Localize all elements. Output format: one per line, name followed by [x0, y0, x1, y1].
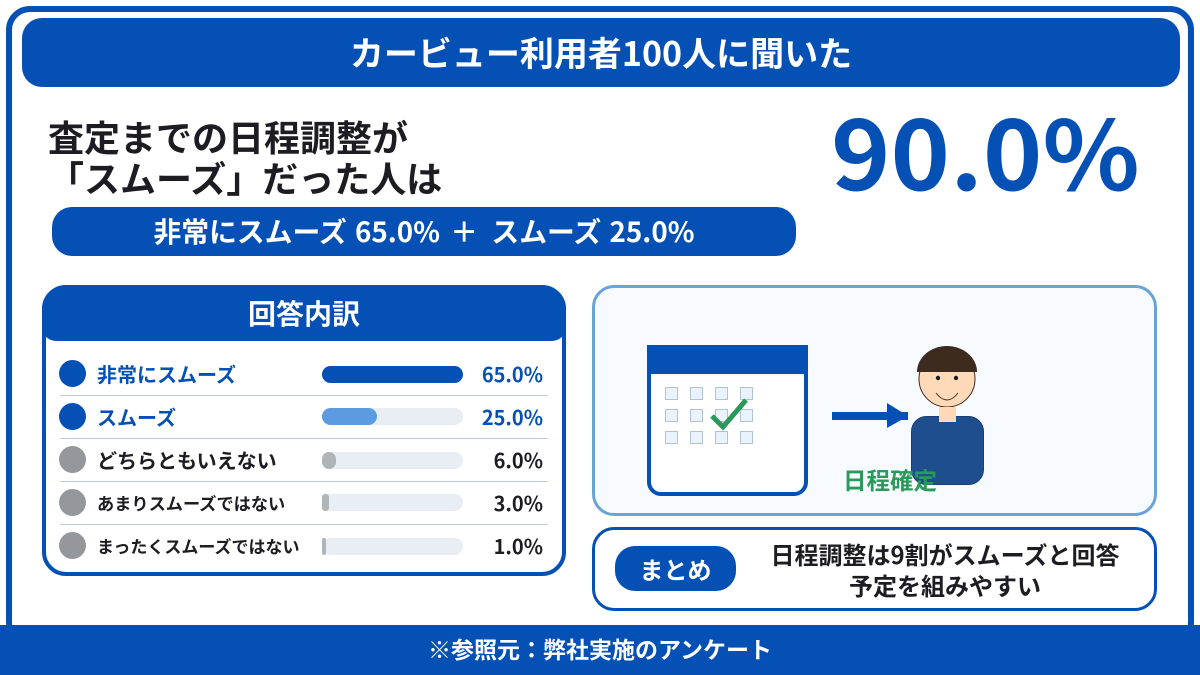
row 4 value: 3.0%	[494, 488, 543, 517]
panel: summary	[592, 527, 1157, 611]
row 4 marker	[59, 489, 86, 516]
row 1 label: 非常にスムーズ	[97, 359, 236, 388]
row 2 bar	[322, 408, 463, 425]
row 1 marker	[59, 360, 86, 387]
summary text: 日程調整は9割がスムーズと回答	[771, 536, 1119, 571]
row 5 marker	[59, 532, 86, 559]
row 3 marker	[59, 446, 86, 473]
row 5 bar	[322, 538, 463, 555]
arrow	[832, 403, 908, 428]
panel: answer breakdown	[42, 285, 566, 576]
title banner	[22, 18, 1180, 87]
summary text	[771, 536, 1119, 602]
label: 日程確定: 日程確定	[843, 462, 937, 496]
summary badge: まとめ	[640, 551, 712, 586]
footer source bar: ※参照元：弊社実施のアンケート	[428, 631, 772, 665]
row 4 label: あまりスムーズではない	[97, 490, 285, 515]
breakdown pill: 非常にスムーズ 65.0% ＋ スムーズ 25.0%	[153, 211, 695, 251]
heading: question: 査定までの日程調整が	[48, 110, 408, 162]
breakdown pill	[52, 207, 796, 256]
row 5 label: まったくスムーズではない	[97, 533, 299, 558]
title banner: カービュー利用者100人に聞いた	[350, 27, 852, 76]
summary text: 予定を組みやすい	[849, 567, 1041, 602]
footer source bar	[0, 625, 1200, 675]
row 1 value: 65.0%	[482, 359, 543, 388]
panel heading: 回答内訳	[42, 285, 566, 341]
row 3 bar	[322, 452, 463, 469]
summary badge	[615, 546, 736, 591]
row 5 value: 1.0%	[494, 531, 543, 560]
heading: question: 「スムーズ」だった人は	[48, 151, 442, 203]
icon: calendar	[647, 345, 808, 494]
icon: person	[912, 346, 984, 484]
row 2 marker	[59, 403, 86, 430]
row 2 label: スムーズ	[97, 402, 176, 431]
big number: 90.0%: 90.0%	[831, 79, 1140, 218]
row 1 bar	[322, 366, 463, 383]
heading: question	[48, 110, 442, 203]
panel heading: 回答内訳: 回答内訳	[248, 293, 360, 333]
row 3 value: 6.0%	[494, 445, 543, 474]
row 2 value: 25.0%	[482, 402, 543, 431]
panel: illustration	[592, 285, 1157, 516]
row 3 label: どちらともいえない	[97, 445, 277, 474]
row 4 bar	[322, 494, 463, 511]
